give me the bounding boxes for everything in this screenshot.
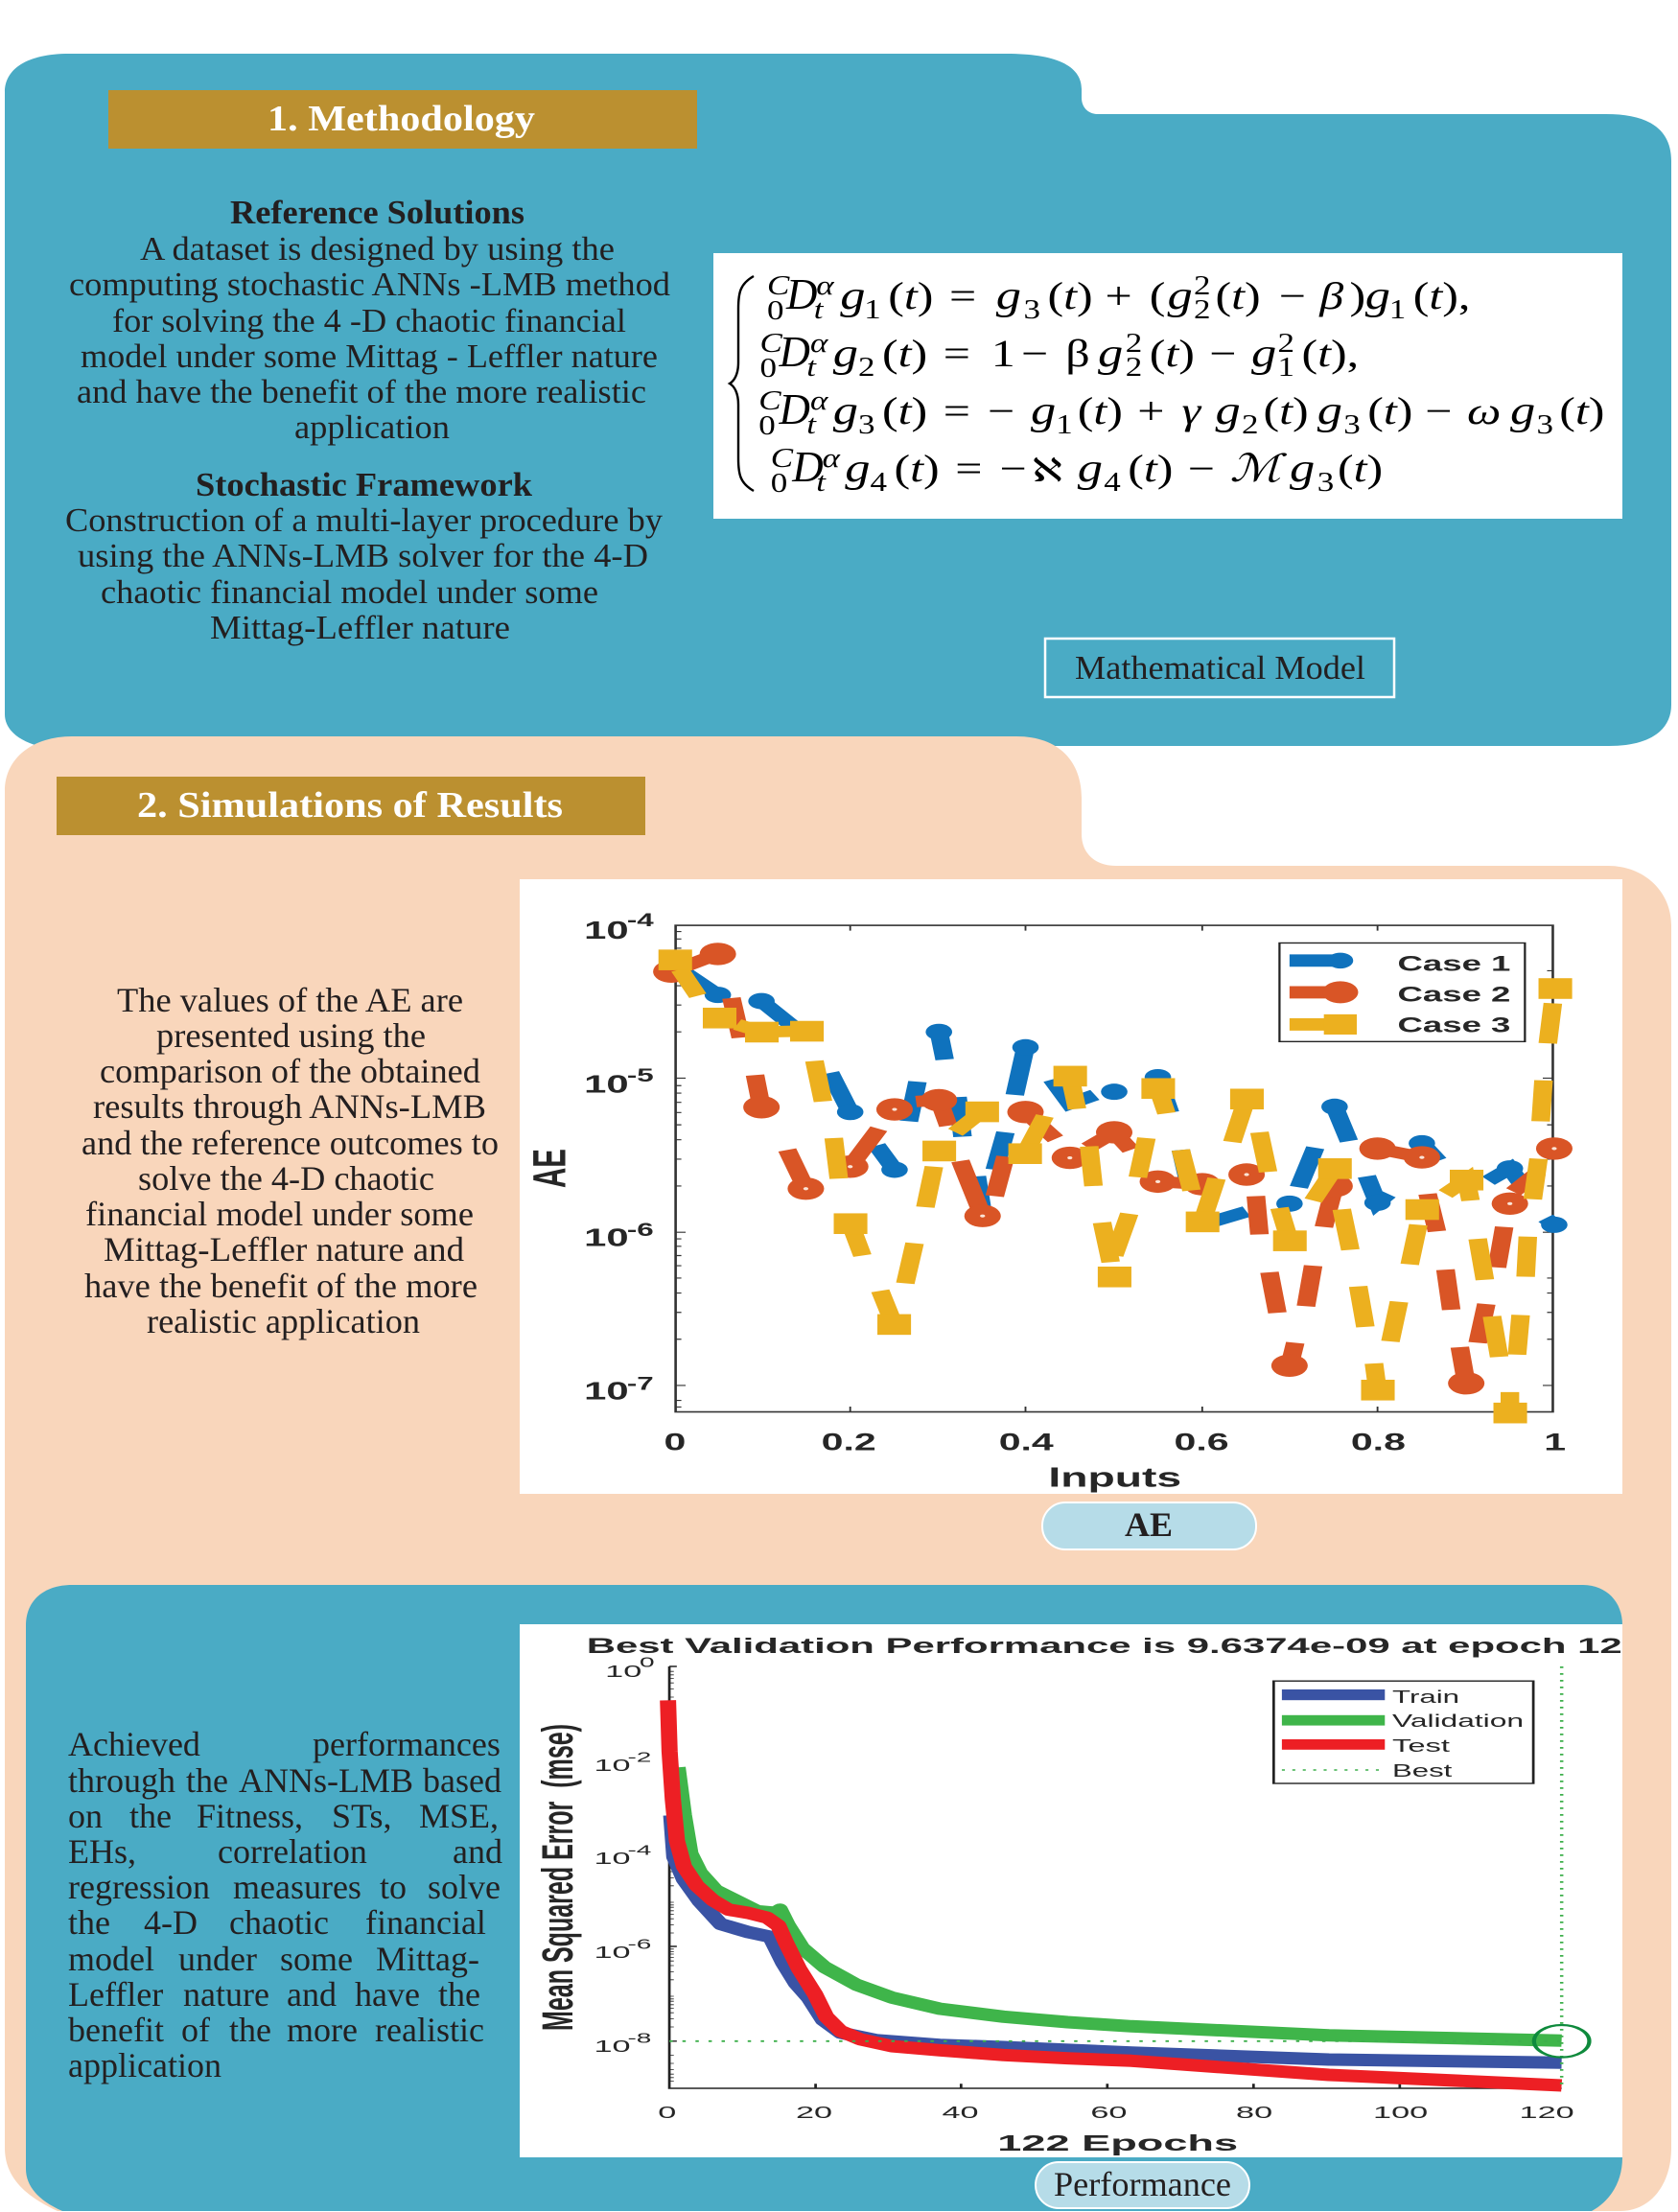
equation box: mathematical model: = <box>949 275 976 317</box>
y axis tick labels: -8 <box>627 2030 651 2046</box>
equation box: mathematical model: (t), <box>1413 275 1470 317</box>
text block: performance description: of <box>181 2011 210 2049</box>
equation box: mathematical model: g <box>1290 447 1315 491</box>
text block: performance description: Leffler <box>68 1975 163 2014</box>
text block: performance description: under <box>178 1940 257 1978</box>
text block: AE description: comparison of the obtained <box>100 1052 480 1090</box>
chart legend: Case 3 <box>1398 1013 1510 1037</box>
chart: validation performance <box>520 1624 1622 2157</box>
text block: reference solutions: Reference Solutions <box>230 194 524 231</box>
text block: performance description: the <box>229 2011 271 2049</box>
equation box: mathematical model: g <box>996 274 1021 318</box>
y axis tick labels: -4 <box>627 1842 651 1858</box>
chart legend <box>1273 1681 1533 1783</box>
equation box: mathematical model: 2 <box>1194 294 1210 324</box>
text block: AE description: financial model under some <box>85 1195 474 1233</box>
equation box: mathematical model: (t) <box>882 390 927 432</box>
x axis tick labels: 0.2 <box>822 1429 876 1455</box>
best marker lines <box>669 1666 1589 2088</box>
y axis tick labels: 10 <box>594 2037 631 2056</box>
series: train <box>671 1815 1562 2062</box>
equation box: mathematical model: β <box>1318 275 1344 317</box>
equation box: mathematical model: = <box>944 333 970 375</box>
x axis tick labels: 0 <box>658 2103 676 2122</box>
x axis tick labels: 1 <box>1544 1429 1566 1455</box>
y axis tick labels: 10 <box>584 1224 629 1251</box>
text block: AE description: The values of the AE are <box>117 981 463 1019</box>
y axis tick labels: -7 <box>627 1373 654 1394</box>
best marker and legend <box>669 1666 1589 2088</box>
y axis tick labels: 10 <box>584 918 629 944</box>
y axis title: Mean Squared Error (mse) <box>534 1724 582 2031</box>
equation box: mathematical model: ω <box>1467 390 1501 432</box>
equation box: mathematical model: g <box>1365 274 1390 318</box>
equation box: mathematical model: (t) <box>1078 390 1123 432</box>
text block: performance description: performances <box>313 1725 501 1763</box>
text block: AE description: results through ANNs-LMB <box>93 1087 486 1126</box>
text block: performance description: model <box>68 1940 154 1978</box>
equation box: mathematical model: C <box>767 270 790 300</box>
equation box: mathematical model: − <box>1000 448 1027 490</box>
equation box: mathematical model: g <box>1098 332 1123 376</box>
equation box: mathematical model: 3 <box>1343 409 1361 439</box>
equation box: mathematical model: − <box>1279 275 1306 317</box>
y axis tick labels: -2 <box>627 1750 651 1765</box>
equation box: mathematical model: α <box>823 443 841 473</box>
equation box: mathematical model: t <box>806 409 817 439</box>
text block: AE description: and the reference outcomes to <box>82 1124 499 1162</box>
chart legend: Test <box>1392 1736 1450 1757</box>
equation box: mathematical model: 3 <box>1024 294 1040 324</box>
text block: performance description: 4-D <box>144 1903 198 1942</box>
equation box: mathematical model <box>713 253 1622 519</box>
equation box: mathematical model: (t) <box>1367 390 1412 432</box>
equation box: mathematical model: g <box>833 332 858 376</box>
equation box: mathematical model: 0 <box>771 468 787 498</box>
equation box: mathematical model: = <box>955 448 982 490</box>
equation box: mathematical model: − <box>1425 390 1452 432</box>
text block: performance description: financial <box>365 1903 486 1942</box>
equation box: mathematical model: (t), <box>1302 333 1359 375</box>
text block: performance description: and <box>287 1975 337 2014</box>
equation box: mathematical model: ℵ <box>1032 454 1062 489</box>
equation box: mathematical model: 2 <box>858 352 874 382</box>
caption: mathematical model <box>1045 639 1394 697</box>
text block: reference solutions: and have the benefit of the more realistic <box>77 373 646 410</box>
equation box: mathematical model: α <box>810 328 829 358</box>
equation box: mathematical model: g <box>840 274 865 318</box>
text block: AE description: solve the 4-D chaotic <box>138 1159 434 1198</box>
text block: stochastic framework: Mittag-Leffler nature <box>210 609 510 646</box>
x axis tick labels: 0.4 <box>999 1429 1054 1455</box>
equation box: mathematical model: β <box>1065 333 1090 375</box>
text block: performance description: some <box>280 1940 353 1978</box>
y axis tick labels: 10 <box>594 1943 631 1962</box>
y axis tick labels: -4 <box>627 909 654 930</box>
equation box: mathematical model: (t) <box>1559 390 1604 432</box>
equation box: mathematical model: g <box>833 389 858 433</box>
text block: stochastic framework <box>65 466 664 646</box>
x axis tick labels <box>664 1429 1566 1455</box>
x axis tick labels: 0.6 <box>1175 1429 1229 1455</box>
text block: AE description: have the benefit of the more <box>84 1267 478 1305</box>
equation box: mathematical model: g <box>1078 447 1103 491</box>
equation box: mathematical model: 1 <box>1056 409 1073 439</box>
equation box: mathematical model: 0 <box>758 410 776 440</box>
equation box: mathematical model: 1 <box>1389 294 1406 324</box>
equation box: mathematical model: 2 <box>1277 328 1294 358</box>
series: performance curves <box>668 1700 1562 2085</box>
equation box: mathematical model: g <box>1168 274 1193 318</box>
y axis tick labels: 10 <box>584 1378 629 1406</box>
equation box: mathematical model: C <box>758 385 782 415</box>
y axis title: AE <box>525 1149 576 1188</box>
equation box: mathematical model: (t) <box>1216 275 1261 317</box>
equation box: mathematical model: 4 <box>871 467 887 497</box>
caption: performance: Performance <box>1054 2165 1231 2203</box>
text block: performance description: ANNs-LMB <box>239 1761 413 1800</box>
caption: performance <box>1036 2162 1249 2208</box>
equation box: mathematical model: t <box>814 294 825 324</box>
text block: performance description: MSE, <box>419 1797 499 1835</box>
caption: mathematical model: Mathematical Model <box>1075 649 1365 687</box>
chart title: Best Validation Performance is 9.6374e-09 at epoch 12 <box>587 1635 1622 1658</box>
text block: performance description: correlation <box>218 1832 367 1871</box>
text block: performance description: more <box>287 2011 358 2049</box>
text block: performance description: chaotic <box>229 1903 329 1942</box>
equation box: mathematical model: C <box>759 328 783 358</box>
equation box: mathematical model: ( <box>1150 275 1165 317</box>
equation box: mathematical model: ℳ <box>1229 448 1287 490</box>
equation box: mathematical model: 2 <box>1242 409 1258 439</box>
equation box: mathematical model: − <box>1188 448 1215 490</box>
equation box: mathematical model: = <box>944 390 970 432</box>
equation box: mathematical model: α <box>816 270 835 300</box>
x axis tick labels <box>658 2103 1574 2122</box>
equation box: mathematical model: t <box>806 352 817 382</box>
text block: performance description: the <box>129 1797 172 1835</box>
equation box: mathematical model: (t) <box>1150 333 1195 375</box>
equation box: mathematical model: 3 <box>858 409 874 439</box>
text block: performance description: STs, <box>332 1797 392 1835</box>
panel: performance <box>26 1585 1622 2211</box>
text block: performance description: nature <box>183 1975 269 2014</box>
equation box: mathematical model: (t) <box>1338 448 1383 490</box>
text block: AE description <box>82 981 499 1340</box>
chart legend: Case 2 <box>1398 983 1510 1007</box>
text block: reference solutions: application <box>294 408 450 446</box>
text block: performance description: the <box>438 1975 480 2014</box>
x axis tick labels: 80 <box>1236 2103 1272 2122</box>
chart legend: Train <box>1392 1688 1459 1708</box>
series: validation <box>678 1767 1562 2040</box>
text block: reference solutions: computing stochastic ANNs -LMB method <box>69 266 671 303</box>
text block: performance description: the <box>186 1761 228 1800</box>
text block: reference solutions: for solving the 4 -D chaotic financial <box>112 302 626 339</box>
equation box: mathematical model: (t) <box>1047 275 1093 317</box>
text block: performance description: solve <box>428 1868 501 1906</box>
equation box: mathematical model: ) <box>1350 275 1365 317</box>
x axis title: Inputs <box>1048 1462 1181 1493</box>
equation box: mathematical model: g <box>1510 389 1535 433</box>
text block: reference solutions <box>69 194 671 446</box>
equation box: mathematical model: + <box>1137 390 1164 432</box>
text block: stochastic framework: using the ANNs-LMB solver for the 4-D <box>78 537 648 574</box>
equation box: mathematical model: 1 <box>864 294 881 324</box>
text block: AE description: presented using the <box>156 1016 426 1055</box>
x axis tick labels: 120 <box>1520 2103 1574 2122</box>
equation box: mathematical model: 4 <box>1104 467 1121 497</box>
equation box: mathematical model: (t) <box>1128 448 1173 490</box>
heading: methodology <box>108 90 697 149</box>
panel: methodology <box>5 54 1671 746</box>
equation box: mathematical model: (t) <box>882 333 927 375</box>
equation box: mathematical model: D <box>779 327 810 376</box>
text block: stochastic framework: chaotic financial model under some <box>101 573 598 611</box>
text block: performance description: benefit <box>68 2011 164 2049</box>
text block: performance description: to <box>380 1868 407 1906</box>
chart legend: Validation <box>1392 1711 1524 1732</box>
chart legend <box>1279 943 1525 1041</box>
chart legend: Case 1 <box>1398 952 1511 976</box>
text block: performance description: measures <box>233 1868 361 1906</box>
equation box: mathematical model: 1 <box>991 333 1015 375</box>
chart: AE line chart <box>520 879 1622 1494</box>
equation box: mathematical model: 0 <box>759 353 777 383</box>
equation box: mathematical model: D <box>791 442 824 491</box>
equation box: mathematical model: (t) <box>888 275 933 317</box>
x axis tick labels: 0.8 <box>1351 1429 1406 1455</box>
text block: performance description: based <box>423 1761 501 1800</box>
equation box: mathematical model: − <box>1209 333 1236 375</box>
equation box: mathematical model: C <box>771 443 794 473</box>
equation box: mathematical model: 3 <box>1536 409 1553 439</box>
equation box: mathematical model: D <box>785 269 818 318</box>
equation box: mathematical model: − <box>988 390 1014 432</box>
equation box: mathematical model: + <box>1105 275 1132 317</box>
equation box: mathematical model: 0 <box>767 295 783 325</box>
text block: performance description: the <box>68 1903 110 1942</box>
y axis tick labels: 0 <box>640 1654 655 1670</box>
x axis tick labels: 20 <box>796 2103 832 2122</box>
series: test <box>668 1700 1562 2085</box>
caption: AE <box>1042 1502 1256 1549</box>
equation box: mathematical model: t <box>816 467 827 497</box>
text block: performance description: Mittag- <box>376 1940 479 1978</box>
text block: reference solutions: model under some Mittag - Leffler nature <box>81 338 658 375</box>
text block: stochastic framework: Stochastic Framework <box>196 466 533 503</box>
text block: performance description: EHs, <box>68 1832 136 1871</box>
equation box: mathematical model: 2 <box>1194 270 1210 300</box>
equation box: mathematical model: 2 <box>1126 328 1142 358</box>
panel: simulations of results <box>5 736 1671 2211</box>
equation box: mathematical model: α <box>810 385 829 415</box>
equation box: mathematical model: (t) <box>894 448 940 490</box>
text block: performance description: application <box>68 2046 221 2084</box>
chart legend: Best <box>1392 1761 1452 1781</box>
equation box: mathematical model: g <box>845 447 870 491</box>
equation box: mathematical model: g <box>1216 389 1241 433</box>
text block: performance description <box>68 1725 502 2084</box>
text block: performance description: Fitness, <box>197 1797 303 1835</box>
equation box: mathematical model: (t) <box>1264 390 1309 432</box>
equation box: mathematical model: 3 <box>1317 467 1334 497</box>
equation box: mathematical model: D <box>779 384 810 433</box>
x axis tick labels: 40 <box>942 2103 979 2122</box>
heading: methodology: 1. Methodology <box>268 99 535 139</box>
y axis tick labels <box>594 1654 655 2056</box>
y axis tick labels: 10 <box>605 1662 641 1681</box>
text block: performance description: have <box>355 1975 420 2014</box>
text block: AE description: Mittag-Leffler nature and <box>104 1230 464 1269</box>
equation box: mathematical model: g <box>1317 389 1342 433</box>
text block: performance description: on <box>68 1797 103 1835</box>
equation box: mathematical model: 2 <box>1126 352 1142 382</box>
text block: AE description: realistic application <box>147 1302 420 1340</box>
y axis tick labels <box>584 909 654 1406</box>
text block: reference solutions: A dataset is designed by using the <box>140 230 615 268</box>
equation box: mathematical model: γ <box>1181 390 1201 432</box>
series: case 2 <box>653 943 1573 1394</box>
y axis tick labels: -6 <box>627 1219 654 1240</box>
equation box: mathematical model: g <box>1031 389 1056 433</box>
text block: performance description: Achieved <box>68 1725 200 1763</box>
series: case 3 <box>659 949 1573 1423</box>
x axis tick labels: 60 <box>1090 2103 1127 2122</box>
text block: performance description: realistic <box>375 2011 484 2049</box>
heading: simulations of results: 2. Simulations of Results <box>137 785 563 826</box>
y axis tick labels: 10 <box>594 1849 631 1868</box>
y axis tick labels: -5 <box>627 1064 654 1086</box>
heading: simulations of results <box>57 777 645 835</box>
series: case 1 <box>680 969 1568 1233</box>
text block: performance description: regression <box>68 1868 210 1906</box>
equation box: mathematical model: 1 <box>1277 352 1294 382</box>
equation box: mathematical model: − <box>1021 333 1048 375</box>
x axis title: 122 Epochs <box>997 2131 1238 2155</box>
x axis tick labels: 100 <box>1373 2103 1428 2122</box>
text block: performance description: through <box>68 1761 175 1800</box>
equation box: mathematical model: g <box>1251 332 1276 376</box>
text block: stochastic framework: Construction of a multi-layer procedure by <box>65 501 664 539</box>
caption: AE: AE <box>1125 1505 1173 1544</box>
y axis tick labels: 10 <box>594 1756 631 1775</box>
y axis tick labels: -6 <box>627 1936 651 1952</box>
y axis tick labels: 10 <box>584 1071 629 1099</box>
text block: performance description: and <box>453 1832 502 1871</box>
x axis tick labels: 0 <box>664 1429 686 1455</box>
